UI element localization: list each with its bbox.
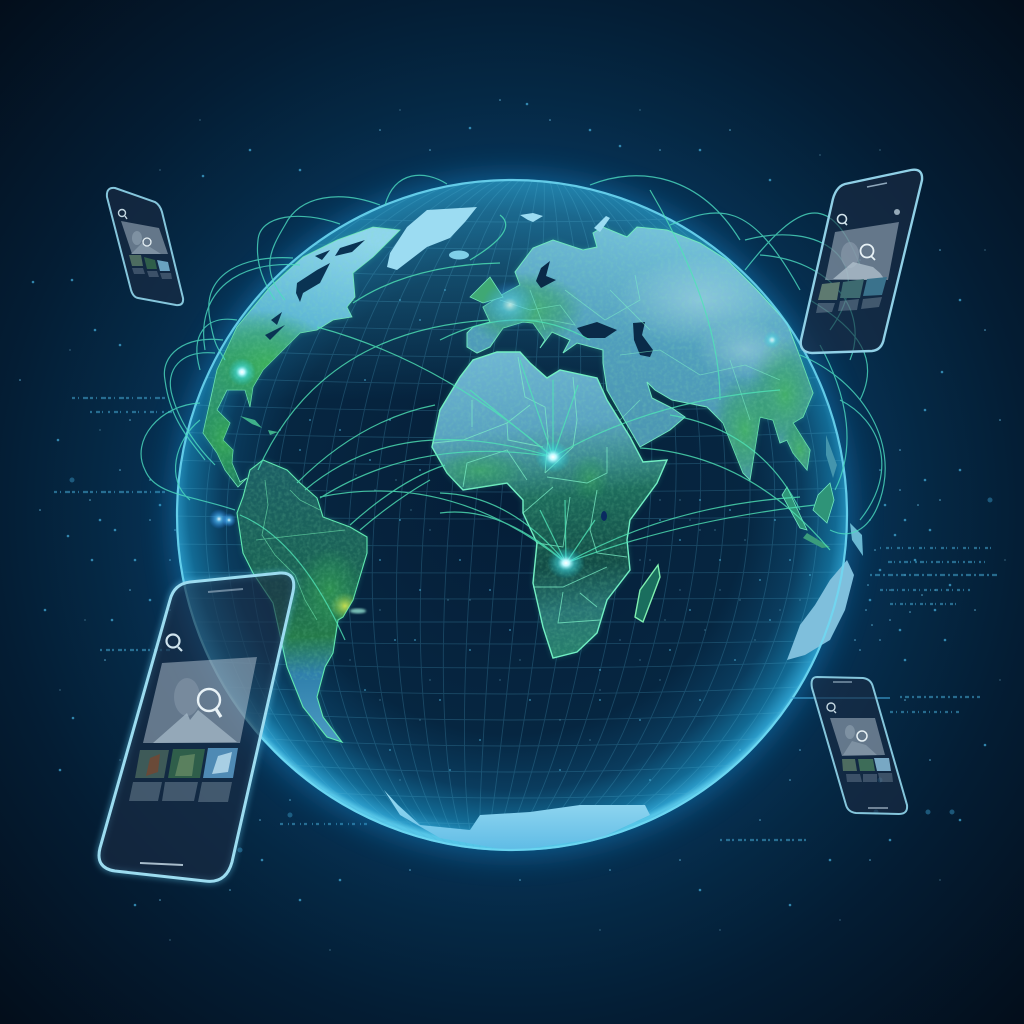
hero person (843, 725, 877, 755)
Iceland (449, 250, 469, 260)
Australia (787, 560, 854, 660)
search icon (166, 634, 182, 651)
flash: Pacific point (209, 509, 236, 529)
thumbnails (842, 758, 891, 771)
New Guinea (850, 523, 863, 556)
hero person (131, 231, 161, 254)
hero image (830, 718, 885, 756)
phone body (99, 573, 294, 881)
hero person (174, 678, 200, 716)
phone: upper right (801, 170, 922, 353)
orbit loops: right cluster (590, 176, 885, 534)
globe atmosphere glow (171, 174, 853, 856)
hero image (825, 222, 899, 280)
connector line (790, 697, 890, 699)
rim highlight (177, 180, 847, 850)
hero mountain (833, 262, 885, 280)
hub: Europe (482, 281, 538, 329)
caption cards (846, 773, 893, 782)
thumbnails (135, 748, 238, 778)
Madagascar (635, 565, 660, 622)
Svalbard (520, 213, 543, 222)
globe ocean (176, 179, 848, 851)
Borneo (813, 483, 834, 523)
hub: North America (228, 358, 256, 386)
upper atmosphere highlight (176, 179, 848, 851)
caption cards (129, 782, 232, 802)
flash: Brazil coast (350, 608, 366, 614)
land texture speckle (205, 232, 810, 680)
search icon (838, 214, 847, 225)
Caribbean (240, 416, 278, 435)
magnifier (857, 731, 867, 741)
caption cards (132, 268, 172, 279)
connection arcs over globe (240, 190, 830, 640)
land masses (170, 180, 863, 851)
British Isles (470, 277, 503, 303)
magnifier (198, 689, 221, 717)
thumbnails (129, 255, 170, 271)
continent: North America (203, 227, 400, 487)
phone body (801, 170, 922, 353)
data dashes left and right (54, 398, 1000, 840)
Philippines (826, 435, 837, 478)
South America borders (256, 480, 345, 620)
hub: Central Asia (763, 331, 781, 349)
home bar (868, 807, 888, 809)
islands (240, 213, 863, 851)
speaker (833, 681, 852, 683)
phone: lower right (790, 677, 907, 814)
phone: large lower left (99, 573, 294, 881)
Sumatra (782, 487, 807, 530)
Africa country borders (433, 357, 627, 623)
hero image (121, 221, 168, 254)
hub: Southern Africa (547, 547, 585, 579)
continent: South America (237, 460, 367, 742)
orbit loops: left cluster (141, 175, 447, 510)
Hudson Bay and Great Lakes (265, 240, 365, 340)
hero image (143, 657, 257, 743)
Eurasia borders (500, 275, 780, 420)
gear icon (894, 209, 900, 215)
hero mountain (153, 710, 237, 743)
Antarctica (384, 790, 650, 851)
search icon (827, 703, 836, 713)
phone glow (99, 573, 294, 881)
thumbnails (818, 277, 887, 300)
search icon (118, 210, 127, 219)
magnifier (860, 244, 875, 260)
caption cards (816, 297, 882, 313)
hero person (841, 242, 859, 268)
phone: upper left (107, 188, 183, 305)
speaker (867, 183, 887, 187)
land glow (203, 227, 813, 742)
background star particles (20, 100, 1005, 950)
continent: Eurasia (467, 227, 813, 480)
Novaya Zemlya (594, 216, 610, 232)
green vegetation and lights (170, 180, 850, 680)
phone body (812, 677, 907, 814)
phone body (107, 188, 183, 305)
Java (803, 533, 830, 548)
hub: Central Africa (535, 441, 571, 473)
ocean sparkle data (280, 290, 810, 780)
speaker (208, 589, 243, 592)
seas: Baltic, Black, Caspian (536, 261, 653, 357)
Lake Victoria (601, 511, 607, 521)
continent: Greenland (387, 207, 477, 270)
magnifier (143, 238, 151, 246)
home bar (140, 863, 183, 865)
globe (170, 145, 863, 885)
graticule (178, 181, 846, 830)
continent: Africa (432, 352, 667, 658)
